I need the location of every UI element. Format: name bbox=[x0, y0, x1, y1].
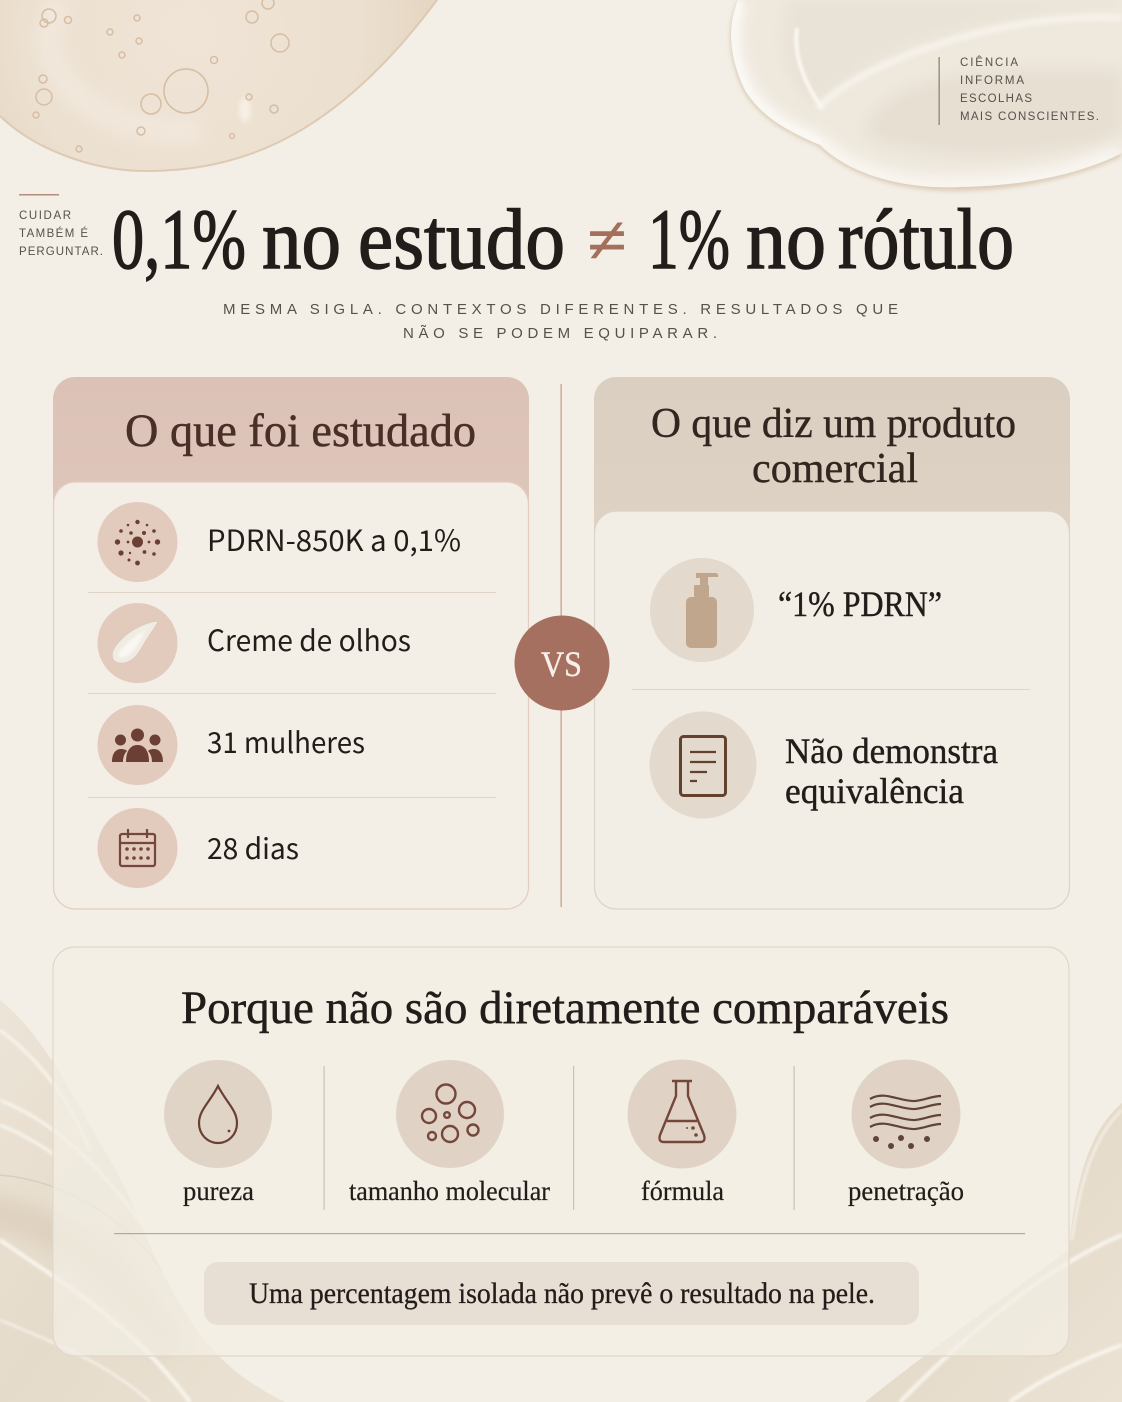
item: pureza bbox=[164, 1060, 272, 1206]
tagline right: MAIS CONSCIENTES. bbox=[960, 111, 1099, 123]
heading right bbox=[651, 401, 1016, 492]
icon: cream bbox=[98, 603, 178, 683]
text: creme: Creme de olhos bbox=[207, 618, 411, 660]
title: 1% bbox=[648, 191, 730, 287]
panel body right bbox=[594, 511, 1070, 909]
item: tamanho molecular bbox=[349, 1060, 550, 1206]
callout: Uma percentagem isolada não prevê o resultado na pele. bbox=[249, 1277, 875, 1310]
tagline left: CUIDAR bbox=[19, 210, 71, 222]
title: rótulo bbox=[838, 191, 1014, 287]
title: no bbox=[262, 191, 341, 287]
cream swatch top right bbox=[730, 0, 1122, 191]
panel: produto comercial bbox=[594, 377, 1070, 909]
title: 0,1% bbox=[112, 191, 246, 287]
heading right: comercial bbox=[752, 446, 918, 492]
text: mulheres: 31 mulheres bbox=[207, 720, 365, 762]
item: pureza: pureza bbox=[183, 1176, 254, 1206]
panel body left bbox=[54, 482, 528, 909]
icon: people bbox=[98, 705, 178, 785]
gel waves bottom left bbox=[0, 1000, 285, 1402]
item: penetracao: penetração bbox=[848, 1176, 964, 1206]
icon: calendar bbox=[98, 808, 178, 888]
vs divider bbox=[514, 384, 610, 907]
tagline left bbox=[19, 194, 103, 258]
panel: o que foi estudado bbox=[53, 377, 529, 909]
item: penetracao bbox=[848, 1060, 964, 1206]
icon: bottle bbox=[650, 558, 754, 662]
item: formula: fórmula bbox=[641, 1176, 724, 1206]
tagline left: PERGUNTAR. bbox=[19, 246, 103, 258]
text: dias: 28 dias bbox=[207, 826, 299, 868]
subtitle: MESMA SIGLA. CONTEXTOS DIFERENTES. RESULTADOS QUE bbox=[223, 301, 898, 318]
icon: document bbox=[650, 712, 756, 818]
title: no bbox=[746, 191, 826, 287]
tagline right bbox=[938, 56, 1099, 125]
item: formula bbox=[628, 1060, 736, 1206]
heading bottom: Porque não são diretamente comparáveis bbox=[181, 982, 949, 1034]
item: tamanho molecular: tamanho molecular bbox=[349, 1176, 550, 1206]
panel: porque nao sao comparaveis bbox=[53, 947, 1069, 1356]
heading left: O que foi estudado bbox=[125, 405, 476, 457]
gel waves bottom right bbox=[865, 1103, 1122, 1402]
gel swatch top left bbox=[0, 0, 437, 171]
icon: molecules bbox=[98, 502, 178, 582]
heading right: O que diz um produto bbox=[651, 401, 1016, 447]
tagline left: TAMBÉM É bbox=[19, 227, 88, 240]
tagline right: CIÊNCIA bbox=[960, 56, 1018, 69]
vs badge bbox=[514, 616, 610, 710]
title: estudo bbox=[358, 191, 565, 287]
vs badge: VS bbox=[541, 644, 582, 684]
text: nao demonstra bbox=[785, 731, 998, 811]
tagline right: INFORMA bbox=[960, 75, 1024, 87]
subtitle: NÃO SE PODEM EQUIPARAR. bbox=[403, 325, 717, 342]
tagline right: ESCOLHAS bbox=[960, 93, 1032, 105]
text: PDRN: PDRN-850K a 0,1% bbox=[207, 518, 461, 560]
callout bbox=[204, 1262, 919, 1325]
text: nao demonstra: equivalência bbox=[785, 771, 964, 811]
text: 1% PDRN: “1% PDRN” bbox=[778, 584, 942, 624]
title: ≠ bbox=[587, 202, 627, 278]
subtitle bbox=[223, 301, 898, 342]
title bbox=[112, 191, 1014, 287]
text: nao demonstra: Não demonstra bbox=[785, 731, 998, 771]
